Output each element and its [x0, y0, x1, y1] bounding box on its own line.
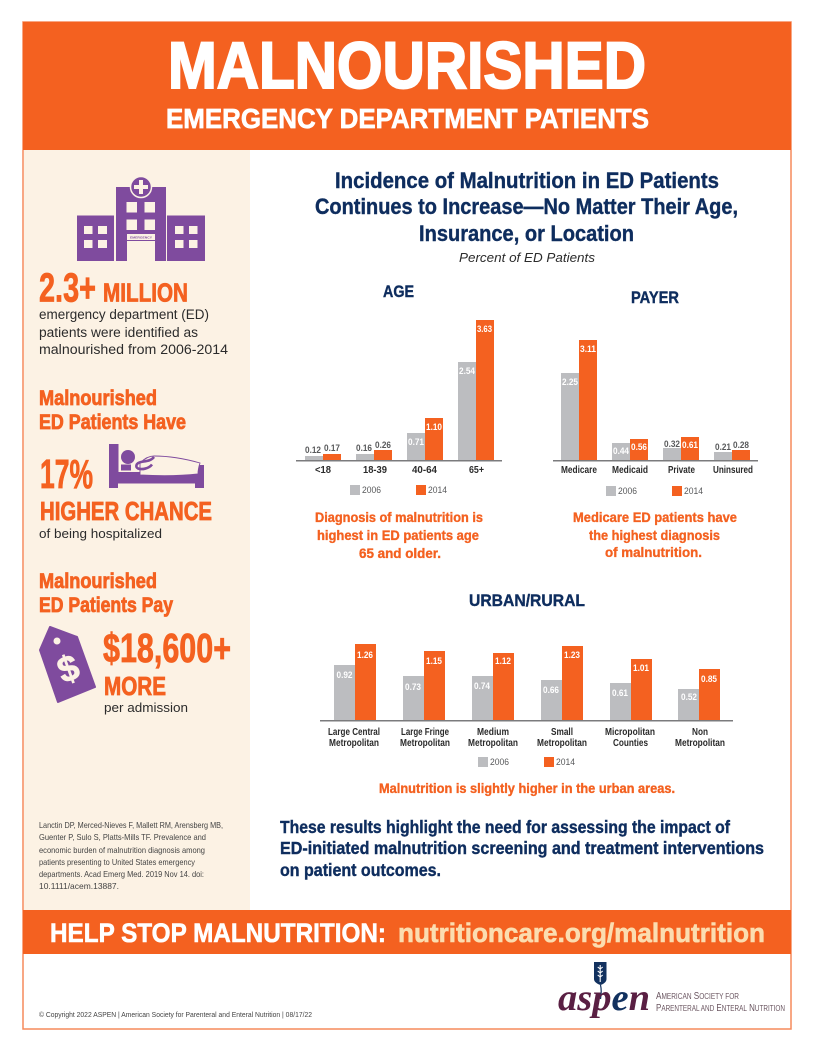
- bar chart: urban/rural: 0.73: [405, 682, 421, 693]
- stat: $18,600+ more: $18,600+: [103, 625, 231, 671]
- chart heading: age: AGE: [383, 282, 414, 301]
- bar chart: urban/rural: Metropolitan: [537, 737, 587, 749]
- bar chart: payer: 2.25: [562, 377, 579, 388]
- heading: malnourished ED patients pay: ED Patients Pay: [39, 594, 173, 617]
- legend: payer: 2014: [684, 486, 703, 496]
- citation: Guenter P, Sulo S, Platts-Mills TF. Prevalence and: [39, 832, 206, 842]
- legend: payer: [606, 486, 703, 496]
- stat: 2.3+ million: patients were identified as: [39, 325, 198, 340]
- caption: age: highest in ED patients age: [317, 528, 479, 543]
- bar chart: urban/rural: Metropolitan: [400, 737, 450, 749]
- legend: age: [350, 485, 447, 495]
- heading: malnourished ED patients pay: Malnourished: [39, 570, 157, 593]
- legend: payer: 2006: [618, 486, 637, 496]
- bar chart: urban/rural: Non: [692, 726, 708, 738]
- bar chart: urban/rural: Large Fringe: [401, 726, 449, 738]
- bar chart: age: 65+: [469, 464, 484, 476]
- bar chart: urban/rural: Counties: [613, 737, 648, 749]
- bar chart: age: 1.10: [426, 422, 442, 433]
- citation: patients presenting to United States emergency: [39, 857, 196, 867]
- bar chart: age: 0.16: [356, 443, 372, 454]
- bar chart: payer: 3.11: [580, 344, 597, 355]
- caption: payer: of malnutrition.: [605, 545, 702, 560]
- caption: age: 65 and older.: [359, 546, 441, 561]
- bar chart: urban/rural: 0.74: [474, 681, 491, 692]
- bar chart: urban/rural: 0.52: [681, 692, 697, 703]
- main heading: Incidence of Malnutrition in ED Patients: [335, 168, 719, 193]
- bar chart: urban/rural: 0.61: [612, 688, 629, 699]
- conclusion text: ED-initiated malnutrition screening and treatment interventions: [280, 838, 764, 858]
- icon: hospital: [77, 176, 205, 261]
- stat: 2.3+ million: MILLION: [103, 278, 188, 308]
- bar chart: payer: [553, 340, 758, 476]
- bar chart: payer: 0.28: [733, 440, 749, 451]
- stat: 2.3+ million: emergency department (ED): [39, 307, 209, 322]
- bar chart: age: 40-64: [412, 464, 437, 476]
- caption: payer: the highest diagnosis: [589, 528, 720, 543]
- citation: 10.1111/acem.13887.: [39, 881, 119, 891]
- conclusion text: on patient outcomes.: [280, 860, 441, 880]
- bar chart: age: 0.17: [324, 443, 340, 454]
- bar chart: payer: 0.44: [613, 446, 630, 457]
- bar chart: payer: 0.56: [631, 442, 647, 453]
- stat: 2.3+ million: [39, 264, 229, 357]
- bar chart: urban/rural: Metropolitan: [468, 737, 518, 749]
- bar chart: urban/rural: Medium: [477, 726, 509, 738]
- bar chart: urban/rural: 1.12: [495, 656, 511, 667]
- bar chart: age: 0.26: [375, 440, 391, 451]
- chart heading: urban/rural: URBAN/RURAL: [469, 591, 585, 610]
- subtitle: EMERGENCY DEPARTMENT PATIENTS: [166, 103, 649, 134]
- legend: urban/rural: [478, 757, 575, 767]
- stat: $18,600+ more: MORE: [104, 671, 166, 701]
- bar chart: urban/rural: 0.85: [701, 674, 718, 685]
- bar chart: age: 0.12: [305, 445, 321, 456]
- heading: malnourished ED patients pay: [39, 570, 173, 617]
- heading: malnourished ED patients have: ED Patients Have: [39, 411, 186, 434]
- icon: price tag: $: [52, 646, 85, 691]
- bar chart: urban/rural: Metropolitan: [675, 737, 725, 749]
- bar chart: urban/rural: Metropolitan: [329, 737, 379, 749]
- bar chart: age: 2.54: [459, 366, 476, 377]
- citation: [39, 820, 223, 891]
- logo: aspen: [558, 962, 785, 1019]
- legend: age: 2006: [362, 485, 381, 495]
- logo: aspen: AMERICAN SOCIETY FOR: [656, 991, 739, 1002]
- bar chart: urban/rural: 1.01: [633, 663, 650, 674]
- bar chart: payer: 0.61: [682, 440, 699, 451]
- bar chart: urban/rural: 0.92: [336, 670, 352, 681]
- bar chart: age: [296, 320, 502, 476]
- bar chart: urban/rural: Large Central: [328, 726, 380, 738]
- legend: urban/rural: 2014: [556, 757, 575, 767]
- bar chart: payer: Medicare: [561, 464, 597, 476]
- stat: higher chance: HIGHER CHANCE: [40, 498, 212, 526]
- heading: malnourished ED patients have: Malnourished: [39, 387, 157, 410]
- stat: 17%: 17%: [40, 451, 93, 497]
- icon: hospital: EMERGENCY: [130, 236, 152, 240]
- main heading: Continues to Increase—No Matter Their Age,: [315, 194, 738, 219]
- stat: 2.3+ million: 2.3+: [39, 264, 96, 310]
- citation: departments. Acad Emerg Med. 2019 Nov 14. doi:: [39, 869, 204, 879]
- main heading: Insurance, or Location: [419, 221, 634, 246]
- logo: aspen: aspen: [558, 977, 650, 1019]
- citation: economic burden of malnutrition diagnosis among: [39, 845, 205, 855]
- bar chart: urban/rural: 0.66: [543, 685, 559, 696]
- bar chart: payer: 0.21: [715, 442, 732, 453]
- logo: aspen: PARENTERAL AND ENTERAL NUTRITION: [656, 1003, 785, 1014]
- footer banner: HELP STOP MALNUTRITION:: [50, 918, 386, 948]
- stat: $18,600+ more: per admission: [104, 700, 188, 715]
- footer banner: nutritioncare.org/malnutrition: [398, 918, 765, 948]
- bar chart: age: <18: [315, 464, 331, 476]
- bar chart: payer: 0.32: [664, 439, 680, 450]
- bar chart: urban/rural: Small: [551, 726, 573, 738]
- citation: Lanctin DP, Merced-Nieves F, Mallett RM, Arensberg MB,: [39, 820, 223, 830]
- legend: urban/rural: 2006: [490, 757, 509, 767]
- bar chart: urban/rural: Micropolitan: [605, 726, 655, 738]
- conclusion text: These results highlight the need for assessing the impact of: [280, 817, 730, 837]
- title: MALNOURISHED: [168, 28, 646, 102]
- caption: payer: Medicare ED patients have: [573, 510, 737, 525]
- panel: left sidebar background: [24, 150, 250, 910]
- stat: $18,600+ more: [103, 625, 231, 715]
- chart heading: payer: PAYER: [631, 288, 679, 307]
- conclusion text: [280, 817, 764, 880]
- bar chart: age: 18-39: [363, 464, 387, 476]
- bar chart: urban/rural: 1.15: [426, 656, 443, 667]
- caption: age: Diagnosis of malnutrition is: [315, 510, 483, 525]
- main heading: [315, 168, 738, 246]
- stat: 2.3+ million: malnourished from 2006-2014: [39, 342, 229, 357]
- stat: higher chance: [39, 498, 212, 541]
- bar chart: payer: Medicaid: [612, 464, 648, 476]
- bar chart: age: 3.63: [477, 324, 492, 335]
- header banner: [23, 22, 791, 150]
- icon: hospital bed: [109, 444, 204, 488]
- heading: malnourished ED patients have: [39, 387, 186, 434]
- footer banner: [23, 910, 791, 954]
- stat: higher chance: of being hospitalized: [39, 526, 162, 541]
- icon: price tag: [40, 627, 95, 702]
- bar chart: age: 0.71: [408, 437, 425, 448]
- bar chart: payer: Uninsured: [713, 464, 753, 476]
- bar chart: urban/rural: 1.26: [357, 650, 373, 661]
- caption: age: [315, 510, 483, 561]
- bar chart: payer: Private: [668, 464, 695, 476]
- caption: urban/rural: Malnutrition is slightly higher in the urban areas.: [379, 781, 675, 796]
- bar chart: urban/rural: [320, 644, 733, 749]
- bar chart: urban/rural: 1.23: [564, 650, 580, 661]
- copyright: © Copyright 2022 ASPEN | American Society for Parenteral and Enteral Nutrition | 08/17/22: [39, 1011, 312, 1019]
- caption: payer: [573, 510, 737, 560]
- chart subtitle: Percent of ED Patients: [459, 250, 596, 265]
- legend: age: 2014: [428, 485, 447, 495]
